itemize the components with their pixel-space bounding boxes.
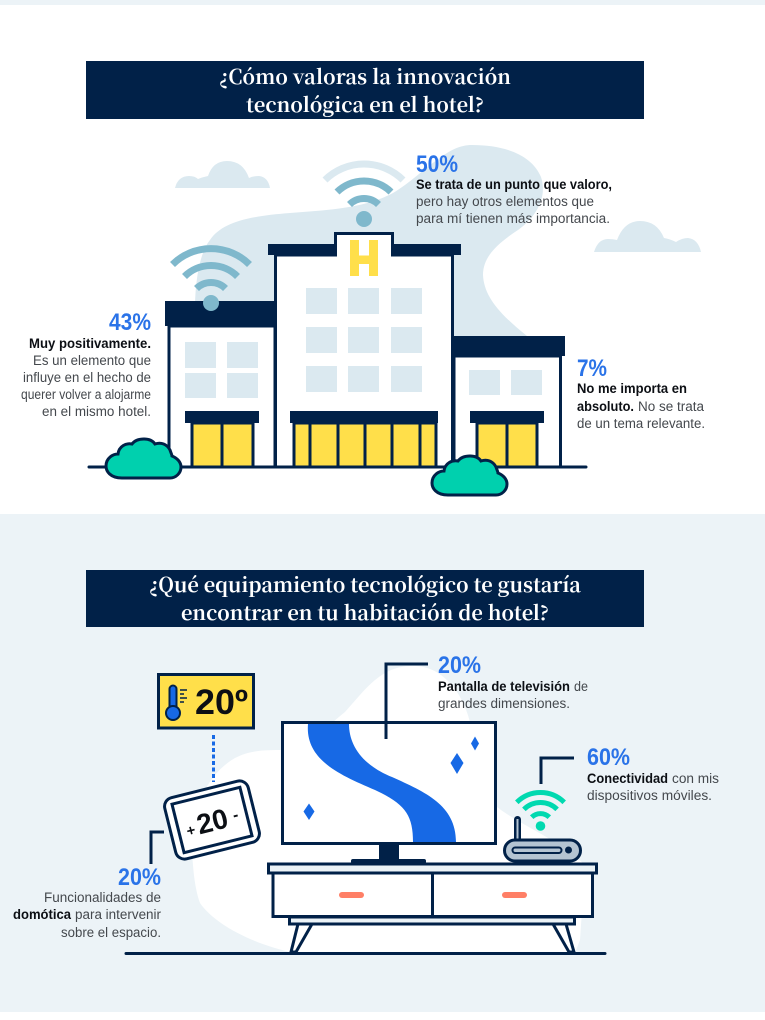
text: home automation 20%: 20% (118, 864, 161, 891)
right building (453, 336, 565, 467)
left building (165, 301, 276, 467)
text: 7% (577, 355, 705, 431)
text: television 20%: de (574, 679, 588, 694)
thermostat device: + (185, 822, 198, 840)
heading: room equipment question: encontrar en tu habitación de hotel? (181, 597, 549, 626)
text: connectivity 60%: con mis (672, 771, 719, 786)
bush: right (432, 456, 507, 495)
screen swoosh (308, 724, 456, 842)
dotted link (212, 735, 215, 782)
icon: wifi left (172, 249, 250, 311)
main building (268, 234, 461, 467)
text: television 20%: Pantalla de televisión (438, 679, 570, 694)
text: 50%: para mí tienen más importancia. (416, 211, 610, 226)
text: 43%: en el mismo hotel. (42, 404, 151, 419)
text: 43%: Es un elemento que (33, 353, 151, 368)
connector: thermostat (151, 832, 164, 864)
text: 50%: pero hay otros elementos que (416, 194, 594, 209)
cloud: right (594, 221, 701, 252)
thermostat device: - (231, 807, 240, 825)
temperature sign (158, 674, 254, 728)
router with wifi (504, 792, 580, 861)
text: 7%: de un tema relevante. (577, 416, 705, 431)
drawer handles (339, 892, 364, 898)
text: 7%: 7% (577, 355, 607, 382)
text: 43% (21, 309, 151, 419)
television (282, 722, 496, 864)
text: 7%: No me importa en (577, 381, 687, 396)
text: connectivity 60%: Conectividad (587, 771, 668, 786)
heading: hotel innovation question: tecnológica en el hotel? (246, 89, 484, 118)
thermostat device (163, 779, 261, 861)
text: 50% (416, 151, 612, 226)
connector: router (541, 758, 574, 784)
background blob behind hotel (195, 145, 543, 400)
heading: hotel innovation question (86, 61, 644, 119)
icon: wifi centre (325, 164, 403, 227)
sparkles (450, 753, 464, 774)
temperature sign: 20º (195, 683, 248, 722)
text: home automation 20%: para intervenir (75, 907, 161, 922)
text: television 20%: 20% (438, 652, 481, 679)
text: 7%: absoluto. (577, 399, 634, 414)
text: television 20%: grandes dimensiones. (438, 696, 570, 711)
floor line (126, 952, 605, 955)
text: home automation 20%: sobre el espacio. (61, 925, 161, 940)
thermostat device: 20 (193, 803, 231, 840)
cloud: left (175, 161, 270, 188)
heading: room equipment question: ¿Qué equipamiento tecnológico te gustaría (149, 569, 581, 598)
text: television 20% (438, 652, 588, 711)
connector inside screen (384, 722, 388, 739)
heading: hotel innovation question: ¿Cómo valoras la innovación (219, 61, 511, 90)
text: connectivity 60%: 60% (587, 744, 630, 771)
text: 43%: 43% (109, 309, 151, 336)
hotel letter H (350, 240, 378, 276)
text: 43%: influye en el hecho de (23, 370, 151, 385)
connector: television (386, 664, 428, 739)
text: connectivity 60% (587, 744, 719, 803)
text: 43%: querer volver a alojarme (21, 387, 151, 402)
text: 50%: 50% (416, 151, 458, 178)
hotel illustration (89, 234, 586, 495)
text: home automation 20% (13, 864, 161, 940)
text: home automation 20%: Funcionalidades de (44, 890, 161, 905)
media cabinet (268, 864, 596, 952)
text: connectivity 60%: dispositivos móviles. (587, 788, 712, 803)
bush: left (106, 439, 181, 478)
text: 7%: No se trata (638, 399, 704, 414)
text: 50%: Se trata de un punto que valoro, (416, 177, 612, 192)
text: 43%: Muy positivamente. (29, 336, 151, 351)
icon: thermometer (166, 686, 187, 720)
ground line (89, 466, 586, 468)
background blob behind furniture (192, 666, 585, 953)
heading: room equipment question (86, 569, 644, 627)
text: home automation 20%: domótica (13, 907, 71, 922)
